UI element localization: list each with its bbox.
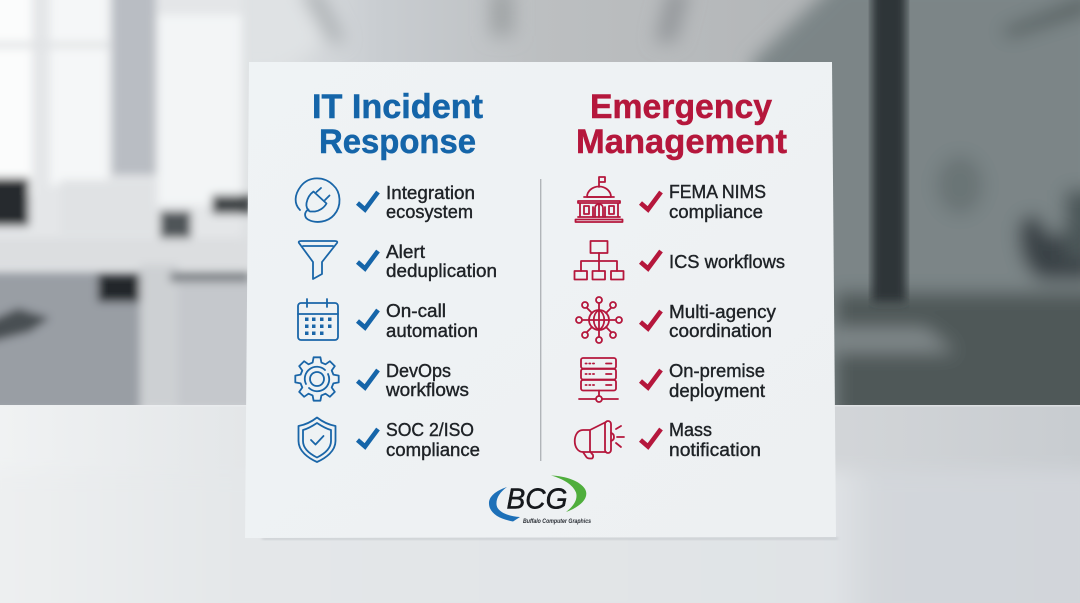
item: Alert deduplication [358,241,497,281]
panel: Emergency Management [574,88,788,460]
item: DevOps workflows: DevOps [386,360,451,381]
item: FEMA NIMS compliance: FEMA NIMS [669,181,766,202]
icon: calendar [298,299,338,340]
item: Mass notification [640,419,761,460]
icon: plug [296,178,340,222]
item: Integration ecosystem: ecosystem [386,201,473,222]
item: DevOps workflows: workflows [385,379,469,400]
heading: Emergency Management: Management [576,123,788,161]
item: Multi-agency coordination [640,301,777,341]
icon: shield [298,418,336,462]
item: Mass notification: Mass [669,419,712,440]
item: Integration ecosystem [358,182,475,222]
icon: network globe [576,297,622,343]
blurred office background [0,0,1080,422]
card shadow [262,537,838,540]
item: On-call automation: On-call [386,300,446,321]
item: SOC 2/ISO compliance: SOC 2/ISO [386,419,474,440]
logo: BCG Buffalo Computer Graphics [489,476,591,525]
item: Multi-agency coordination: coordination [669,320,772,341]
item: ICS workflows: ICS workflows [669,251,785,272]
heading: Emergency Management: Emergency [590,88,772,126]
icon: server rack [579,358,618,402]
white card [245,62,836,538]
item: Alert deduplication: deduplication [386,260,497,281]
icon: government building [576,177,622,222]
white table surface [0,405,1080,603]
heading: IT Incident Response: Response [319,123,476,161]
item: Alert deduplication: Alert [386,241,426,262]
item: FEMA NIMS compliance [640,181,766,222]
heading: IT Incident Response [312,88,484,161]
item: On-call automation: automation [386,320,478,341]
logo: BCG Buffalo Computer Graphics: BCG [506,484,568,516]
item: Integration ecosystem: Integration [386,182,475,203]
icon: org chart [574,241,624,280]
icon: megaphone [575,421,624,458]
item: Mass notification: notification [669,439,761,460]
icon: gear [295,357,339,401]
column divider [540,179,541,461]
item: On-call automation [358,300,478,341]
item: On-premise deployment: On-premise [669,360,765,381]
panel: IT Incident Response [295,88,497,462]
item: On-premise deployment: deployment [669,380,766,401]
item: SOC 2/ISO compliance [358,419,480,460]
item: DevOps workflows [358,360,469,400]
logo: BCG Buffalo Computer Graphics: Buffalo Computer Graphics [523,518,591,525]
item: SOC 2/ISO compliance: compliance [386,439,480,460]
icon: funnel [299,241,337,279]
heading: Emergency Management [576,88,788,161]
item: FEMA NIMS compliance: compliance [669,201,763,222]
item: Multi-agency coordination: Multi-agency [669,301,777,322]
heading: IT Incident Response: IT Incident [312,88,484,126]
item: On-premise deployment [640,360,766,401]
